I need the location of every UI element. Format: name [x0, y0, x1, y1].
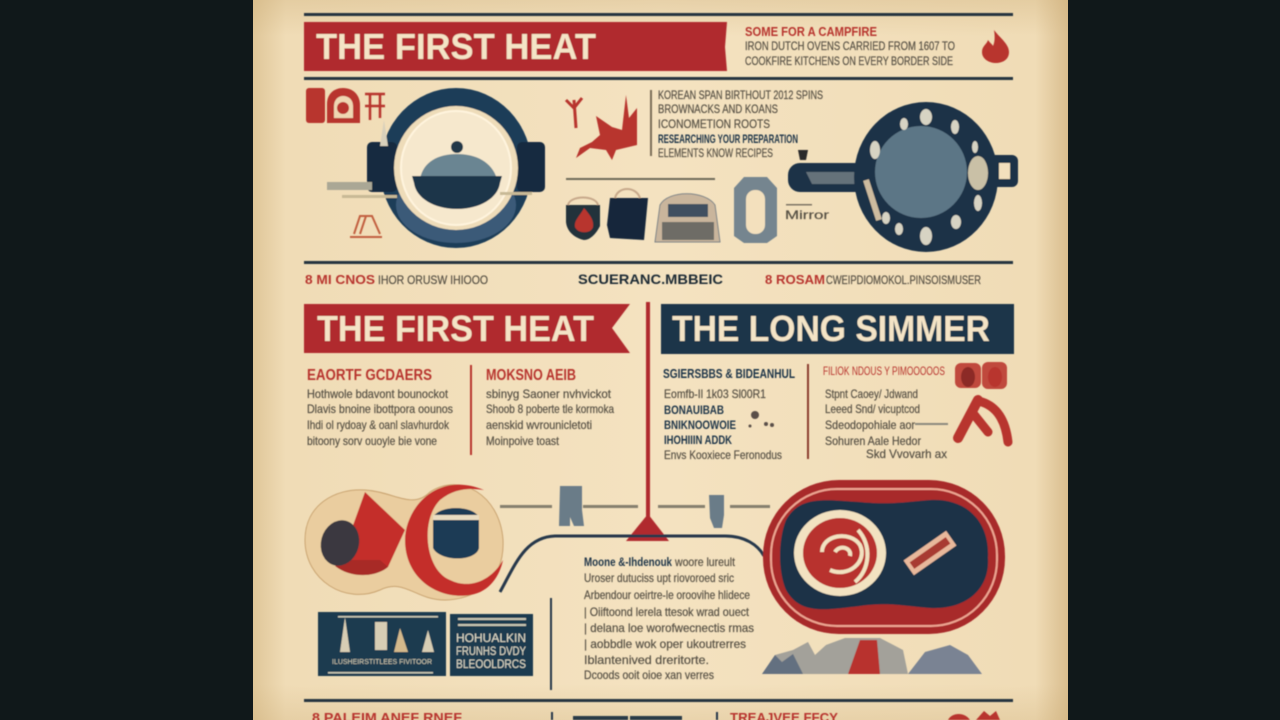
small rule	[566, 178, 715, 180]
text block: center story: Uroser dutuciss upt riovoroed sric	[584, 571, 734, 585]
column: moke: MOKSNO AEIB	[486, 367, 576, 384]
header intro text: COOKFIRE KITCHENS ON EVERY BORDER SIDE	[745, 54, 953, 68]
navy panel: caption: HOHUALKIN	[456, 631, 526, 645]
text block: notes: ICONOMETION ROOTS	[658, 117, 770, 131]
footer captions row: SCUERANC.MBBEIC	[578, 271, 723, 287]
column: long simmer notes	[663, 364, 809, 462]
column: early goods	[307, 365, 472, 455]
text block: notes	[650, 88, 823, 160]
connector rules with figures	[500, 486, 770, 528]
navy panel: tools: ILUSHEIRSTITLEES FIVITOOR	[332, 659, 432, 666]
banner: the first heat: THE FIRST HEAT	[317, 308, 594, 349]
text block: notes: BROWNACKS AND KOANS	[658, 102, 778, 116]
column: early goods: Dlavis bnoine ibottpora oounos	[307, 402, 453, 416]
text block: center story: Dcoods ooit oioe xan verres	[584, 668, 714, 682]
icon: flame	[982, 30, 1009, 63]
text block: notes: RESEARCHING YOUR PREPARATION	[658, 132, 798, 146]
illustration: mountains	[762, 638, 982, 674]
text block: center story: | aobbdle wok oper ukoutrerres	[584, 637, 746, 651]
navy panel: caption: FRUNHS DVDY	[456, 644, 526, 658]
column: moke: aenskid wvrounicletoti	[486, 418, 592, 432]
column: filtering notes: Sdeodopohiale aor	[825, 418, 915, 432]
navy panel: caption: BLEOOLDRCS	[456, 657, 526, 671]
text block: center story: Moone &-Ihdenouk	[584, 555, 672, 569]
column: filtering notes: Stpnt Caoey/ Jdwand	[825, 387, 918, 401]
header intro text: IRON DUTCH OVENS CARRIED FROM 1607 TO	[745, 39, 955, 53]
column: long simmer notes: Envs Kooxiece Feronodus	[664, 448, 782, 462]
column: moke	[486, 367, 614, 448]
footer captions row: CWEIPDIOMOKOL.PINSOISMUSER	[826, 273, 981, 287]
icon: tiny figure	[798, 150, 808, 160]
column: long simmer notes: BONAUIBAB	[664, 403, 724, 417]
column: early goods: bitoony sorv ouoyle bie vone	[307, 434, 437, 448]
curved connector	[500, 536, 764, 592]
illustration: tan and red hearth shape	[305, 485, 503, 600]
text block: center story: woore lureult	[674, 555, 736, 569]
icon: red jars	[955, 362, 1007, 389]
column: long simmer notes: IHOHIIIN ADDK	[664, 433, 732, 447]
divider	[550, 598, 552, 690]
icon: red hammer and sickle shape	[958, 400, 1008, 442]
column: early goods: EAORTF GCDAERS	[307, 367, 432, 384]
bottom strip partial	[312, 710, 1000, 720]
column: moke: Moinpoive toast	[486, 434, 560, 448]
column: filtering notes: Leeed Snd/ vicuptcod	[825, 402, 920, 416]
column: filtering notes	[823, 364, 948, 461]
icons: kitchen items: Mirror	[785, 208, 829, 222]
column: filtering notes: Sohuren Aale Hedor	[825, 434, 921, 448]
paper sheet	[253, 0, 1068, 720]
column: long simmer notes: Eomfb-Il 1k03 Sl00R1	[664, 387, 766, 401]
text block: center story: Arbendour oeirtre-le oroovihe hlidece	[584, 588, 750, 602]
column: long simmer notes: BNIKNOOWOIE	[664, 418, 736, 432]
icons: kitchen items	[566, 177, 829, 243]
column: moke: Shoob 8 poberte tle kormoka	[486, 402, 614, 416]
footer captions row: 8 MI CNOS	[305, 273, 375, 287]
column: early goods: Ihdi ol rydoay & oanl slavhurdok	[307, 418, 450, 432]
illustration: dutch oven in ring	[327, 88, 545, 248]
column: moke: sbinyg Saoner nvhvickot	[486, 387, 612, 401]
column: early goods: Hothwole bdavont bounockot	[307, 387, 449, 401]
column: filtering notes: Skd Vvovarh ax	[866, 447, 947, 461]
text block: center story	[584, 555, 754, 682]
text block: center story: Iblantenived dreritorte.	[584, 653, 709, 667]
illustration: red oval platter	[763, 480, 1005, 634]
footer captions row: 8 ROSAM	[765, 273, 825, 287]
header banner: the first heat	[304, 22, 727, 71]
column: filtering notes: FILIOK NDOUS Y PIMOOOOOS	[823, 364, 945, 378]
icon: small dots	[748, 411, 774, 428]
text block: notes: ELEMENTS KNOW RECIPES	[658, 146, 773, 160]
banner: the long simmer: THE LONG SIMMER	[672, 308, 990, 349]
section rules	[304, 13, 1013, 702]
header intro text	[745, 25, 955, 68]
text block: center story: | Oiiftoond lerela ttesok wrad ouect	[584, 605, 750, 619]
header banner: the first heat: THE FIRST HEAT	[316, 26, 596, 67]
illustration: round pan from above	[788, 102, 1018, 252]
footer captions row: IHOR ORUSW IHIOOO	[378, 273, 488, 287]
text block: notes: KOREAN SPAN BIRTHOUT 2012 SPINS	[658, 88, 823, 102]
text block: center story: | delana loe worofwecnectis rmas	[584, 621, 754, 635]
header intro text: SOME FOR A CAMPFIRE	[745, 25, 877, 39]
navy panel: tools	[318, 612, 446, 676]
column: long simmer notes: SGIERSBBS & BIDEANHUL	[663, 366, 795, 381]
icons: red stamps	[306, 88, 385, 123]
illustration: red bird	[566, 95, 637, 160]
center vertical divider and triangle	[626, 302, 669, 541]
footer captions row	[305, 271, 981, 287]
navy panel: caption	[450, 614, 533, 676]
icon: red tripod	[350, 216, 382, 237]
